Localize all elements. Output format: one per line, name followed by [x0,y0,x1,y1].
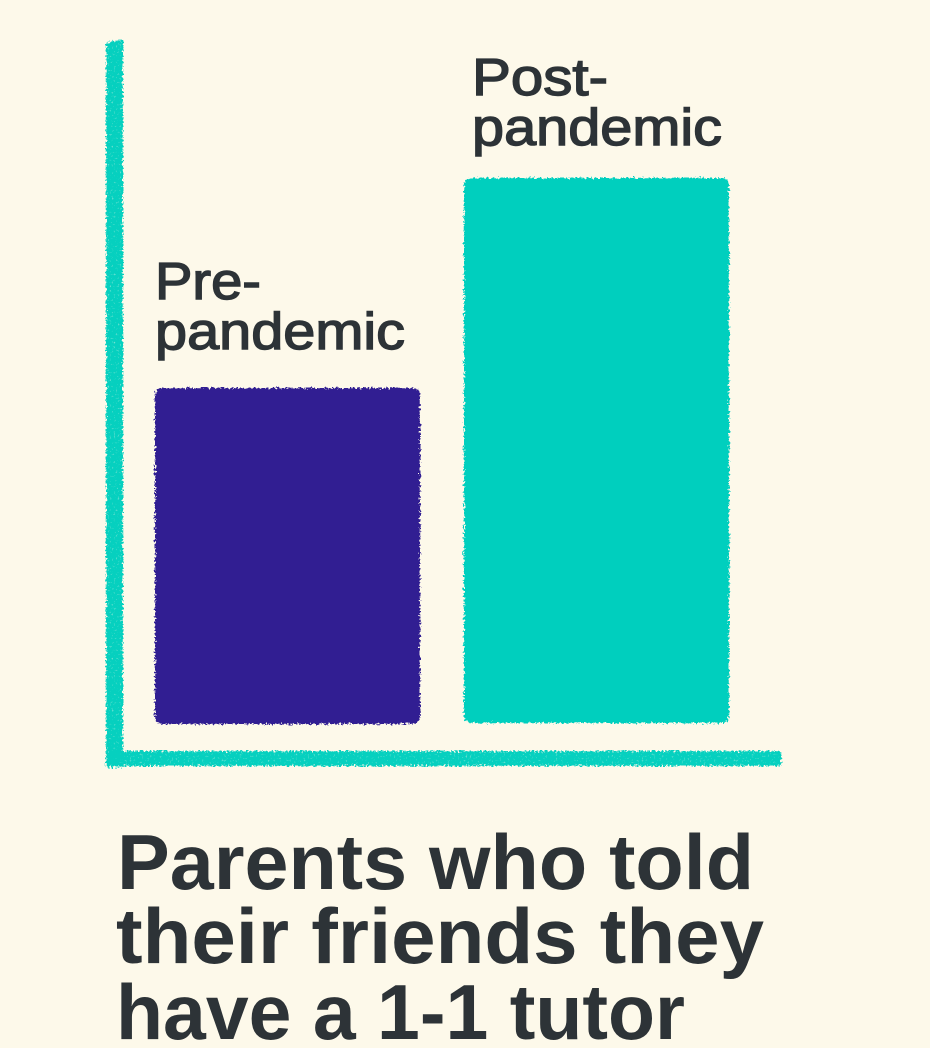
label: post-pandemic: pandemic [472,99,722,157]
title: Parents who told [117,818,754,906]
bar: post-pandemic [464,178,729,723]
chart: pre- and post-pandemic bars [106,39,781,767]
title [116,818,764,1048]
bar: pre-pandemic [155,388,420,724]
title: their friends they [116,892,764,980]
label: post-pandemic [472,49,722,157]
y axis [106,39,123,767]
label: pre-pandemic: pandemic [155,303,405,361]
label: post-pandemic: Post- [472,49,608,107]
label: pre-pandemic [155,253,405,361]
label: pre-pandemic: Pre- [155,253,261,311]
x axis [106,751,781,766]
